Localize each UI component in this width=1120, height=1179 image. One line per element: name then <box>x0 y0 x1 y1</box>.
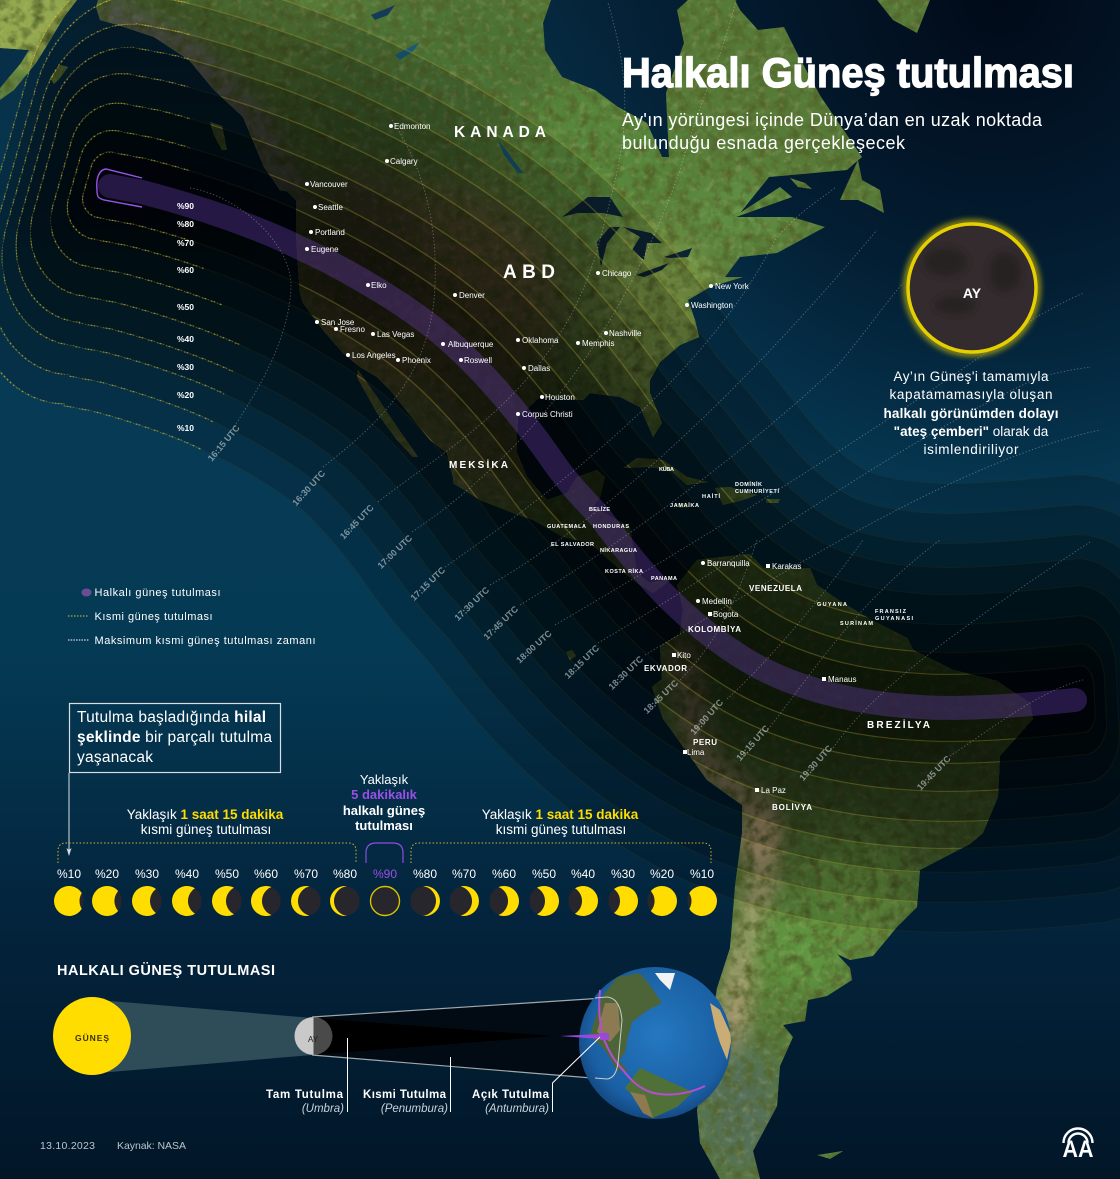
UTC time labels: 19:30 UTC <box>797 743 835 783</box>
UTC time labels: 19:15 UTC <box>734 723 772 763</box>
city markers and names: Phoenix <box>402 356 431 365</box>
country labels: KÜBA <box>659 466 674 473</box>
magnitude percentage labels: %90 <box>177 201 194 211</box>
country labels: EL SALVADOR <box>551 542 594 548</box>
AA agency logo: AA <box>1062 1136 1094 1163</box>
callout: crescent start: şeklinde bir parçalı tutulma <box>77 729 272 746</box>
subtitle: bulunduğu esnada gerçekleşecek <box>622 133 906 153</box>
diagram heading: HALKALI GÜNEŞ TUTULMASI <box>57 962 275 979</box>
annular eclipse path <box>97 169 1075 708</box>
eclipse phase percentage labels: %70 <box>452 867 476 881</box>
country labels: KANADA <box>454 124 546 141</box>
subtitle <box>622 110 1043 153</box>
shadow zone labels: Kısmi Tutulma <box>363 1089 447 1101</box>
city markers and names: Portland <box>315 228 345 237</box>
eclipse phase percentage labels <box>57 867 714 881</box>
penumbra shadow <box>312 998 622 1079</box>
annular phase duration <box>343 772 425 833</box>
city markers and names: Oklahoma <box>522 336 559 345</box>
city markers and names: Kito <box>677 651 691 660</box>
sun <box>53 997 131 1075</box>
annular phase duration: 5 dakikalık <box>351 787 418 802</box>
shadow zone labels: (Antumbura) <box>485 1103 549 1115</box>
moon <box>294 1017 332 1055</box>
country labels: KOLOMBİYA <box>688 625 741 634</box>
country labels: GUYANA <box>817 602 847 608</box>
moon description text: isimlendiriliyor <box>924 442 1019 457</box>
antumbra wedge <box>560 1033 609 1040</box>
partial phase duration left: kısmi güneş tutulması <box>141 822 271 837</box>
moon: AY <box>308 1035 319 1044</box>
magnitude percentage labels: %70 <box>177 238 194 248</box>
city markers and names: Denver <box>459 291 485 300</box>
eclipse phase discs <box>54 886 717 916</box>
city markers and names: Los Angeles <box>352 351 396 360</box>
moon description text <box>884 369 1058 457</box>
city markers and names: Eugene <box>311 245 339 254</box>
country labels: HAİTİ <box>702 493 720 500</box>
umbra cone <box>313 1018 553 1055</box>
eclipse phase percentage labels: %20 <box>95 867 119 881</box>
UTC time labels: 17:00 UTC <box>376 533 415 571</box>
country labels: VENEZUELA <box>749 584 802 593</box>
UTC time labels: 19:45 UTC <box>915 753 953 792</box>
city markers and names: Memphis <box>582 339 614 348</box>
eclipse phase percentage labels: %70 <box>294 867 318 881</box>
illustration: moon with ring of fire: AY <box>963 285 982 301</box>
country labels: EKVADOR <box>644 664 687 673</box>
country labels: BELİZE <box>589 506 610 513</box>
date and source: Kaynak: NASA <box>117 1140 186 1152</box>
shadow footprint outline <box>595 997 622 1079</box>
UTC time labels: 17:15 UTC <box>409 565 448 603</box>
city markers and names: Manaus <box>828 675 856 684</box>
great lakes <box>371 5 692 277</box>
city markers and names: Karakas <box>772 562 801 571</box>
callout: crescent start: Tutulma başladığında hilal <box>77 709 266 726</box>
phase brackets <box>58 843 711 863</box>
city markers and names: Dallas <box>528 364 550 373</box>
country labels: CUMHURİYETİ <box>735 488 779 495</box>
city markers and names: Roswell <box>464 356 492 365</box>
UTC time labels: 18:15 UTC <box>563 643 602 681</box>
country labels: PERU <box>693 738 717 747</box>
country labels: GUATEMALA <box>547 524 586 530</box>
annular phase duration: halkalı güneş <box>343 803 425 818</box>
date and source: 13.10.2023 <box>40 1140 95 1152</box>
partial phase duration right <box>482 807 639 837</box>
UTC time labels: 18:45 UTC <box>642 678 681 716</box>
city markers and names: La Paz <box>761 786 786 795</box>
city markers and names: Seattle <box>318 203 343 212</box>
partial phase duration left <box>127 807 284 837</box>
UTC time labels: 16:15 UTC <box>206 423 242 463</box>
city markers and names: Edmonton <box>394 122 430 131</box>
eclipse shadow bands over ocean <box>0 0 1120 930</box>
magnitude percentage labels: %10 <box>177 423 194 433</box>
country labels: PANAMA <box>651 576 677 582</box>
eclipse phase percentage labels: %40 <box>571 867 595 881</box>
eclipse phase percentage labels: %30 <box>135 867 159 881</box>
moon description text: kapatamamasıyla oluşan <box>890 387 1052 402</box>
moon description text: "ateş çemberi" olarak da <box>894 424 1049 439</box>
UTC time labels: 16:30 UTC <box>290 468 328 508</box>
city markers and names: Washington <box>691 301 733 310</box>
UTC time labels: 17:30 UTC <box>453 585 492 623</box>
eclipse phase percentage labels: %60 <box>254 867 278 881</box>
callout: crescent start: yaşanacak <box>77 749 153 766</box>
city markers and names: Corpus Christi <box>522 410 573 419</box>
shadow zone labels: Açık Tutulma <box>472 1089 550 1101</box>
city markers and names: New York <box>715 282 750 291</box>
UTC time labels: 18:30 UTC <box>607 654 646 692</box>
country labels: NİKARAGUA <box>600 547 637 554</box>
country labels: DOMİNİK <box>735 481 762 488</box>
city markers and names: Las Vegas <box>377 330 414 339</box>
city markers and names: Chicago <box>602 269 632 278</box>
UTC time labels: 17:45 UTC <box>482 604 521 642</box>
country labels: BOLİVYA <box>772 803 812 812</box>
city markers and names: Medellin <box>702 597 732 606</box>
eclipse phase percentage labels: %90 <box>373 867 397 881</box>
partial eclipse contour lines <box>0 0 1120 930</box>
moon description text: Ay’ın Güneş'i tamamıyla <box>894 369 1049 384</box>
legend <box>68 587 316 647</box>
eclipse shadow bands over land <box>28 0 1033 931</box>
light cone <box>99 1000 312 1073</box>
legend: Kısmi güneş tutulması <box>94 611 212 623</box>
partial phase duration right: Yaklaşık 1 saat 15 dakika <box>482 807 639 822</box>
country labels: ABD <box>503 262 555 283</box>
magnitude percentage labels: %50 <box>177 302 194 312</box>
magnitude percentage labels <box>177 201 194 433</box>
magnitude percentage labels: %30 <box>177 362 194 372</box>
annular phase duration: tutulması <box>355 818 413 833</box>
city markers and names: Vancouver <box>310 180 348 189</box>
moon description text: halkalı görünümden dolayı <box>884 406 1058 421</box>
country labels: FRANSIZ <box>875 609 907 615</box>
maximum eclipse time lines <box>190 0 1100 756</box>
city markers and names: Bogota <box>713 610 739 619</box>
eclipse phase percentage labels: %50 <box>532 867 556 881</box>
illustration: moon with ring of fire <box>906 222 1038 354</box>
magnitude percentage labels: %40 <box>177 334 194 344</box>
eclipse phase percentage labels: %10 <box>57 867 81 881</box>
annular phase duration: Yaklaşık <box>360 772 409 787</box>
UTC time labels <box>206 423 953 792</box>
eclipse phase percentage labels: %10 <box>690 867 714 881</box>
shadow zone labels: (Umbra) <box>302 1103 344 1115</box>
magnitude percentage labels: %20 <box>177 390 194 400</box>
eclipse phase percentage labels: %60 <box>492 867 516 881</box>
country labels <box>449 124 930 812</box>
legend: Halkalı güneş tutulması <box>94 587 220 599</box>
country labels: KOSTA RİKA <box>605 568 643 575</box>
subtitle: Ay'ın yörüngesi içinde Dünya’dan en uzak noktada <box>622 110 1043 130</box>
UTC time labels: 18:00 UTC <box>514 628 554 665</box>
eclipse phase percentage labels: %50 <box>215 867 239 881</box>
eclipse phase percentage labels: %80 <box>333 867 357 881</box>
UTC time labels: 16:45 UTC <box>338 502 376 541</box>
legend: Maksimum kısmi güneş tutulması zamanı <box>94 635 316 647</box>
UTC time labels: 19:00 UTC <box>688 697 726 737</box>
city markers and names: Fresno <box>340 325 365 334</box>
city markers and names: San Jose <box>321 318 355 327</box>
city markers and names: Elko <box>371 281 387 290</box>
city markers and names: Albuquerque <box>448 340 494 349</box>
earth globe <box>579 967 732 1119</box>
country labels: JAMAİKA <box>670 502 699 509</box>
shadow zone labels: (Penumbura) <box>381 1103 448 1115</box>
eclipse phase percentage labels: %80 <box>413 867 437 881</box>
title: Halkalı Güneş tutulması <box>622 49 1074 96</box>
callout: crescent start <box>66 704 280 856</box>
country labels: MEKSİKA <box>449 458 508 471</box>
shadow zone labels: Tam Tutulma <box>266 1089 344 1101</box>
city markers and names: Lima <box>687 748 705 757</box>
country labels: BREZİLYA <box>867 718 930 731</box>
country labels: GUYANASI <box>875 616 913 622</box>
eclipse phase percentage labels: %30 <box>611 867 635 881</box>
sun: GÜNEŞ <box>75 1033 109 1043</box>
diagram: sun moon earth geometry <box>53 967 732 1119</box>
country labels: HONDURAS <box>593 524 629 530</box>
magnitude percentage labels: %80 <box>177 219 194 229</box>
partial phase duration left: Yaklaşık 1 saat 15 dakika <box>127 807 284 822</box>
city markers and names: Barranquilla <box>707 559 750 568</box>
country labels: SURİNAM <box>840 620 873 627</box>
city markers and names <box>305 122 856 795</box>
city markers and names: Calgary <box>390 157 418 166</box>
eclipse phase percentage labels: %20 <box>650 867 674 881</box>
partial phase duration right: kısmi güneş tutulması <box>496 822 626 837</box>
magnitude percentage labels: %60 <box>177 265 194 275</box>
city markers and names: Nashville <box>609 329 642 338</box>
shadow zone labels <box>266 1037 600 1115</box>
date and source <box>40 1140 186 1152</box>
city markers and names: Houston <box>545 393 575 402</box>
eclipse phase percentage labels: %40 <box>175 867 199 881</box>
